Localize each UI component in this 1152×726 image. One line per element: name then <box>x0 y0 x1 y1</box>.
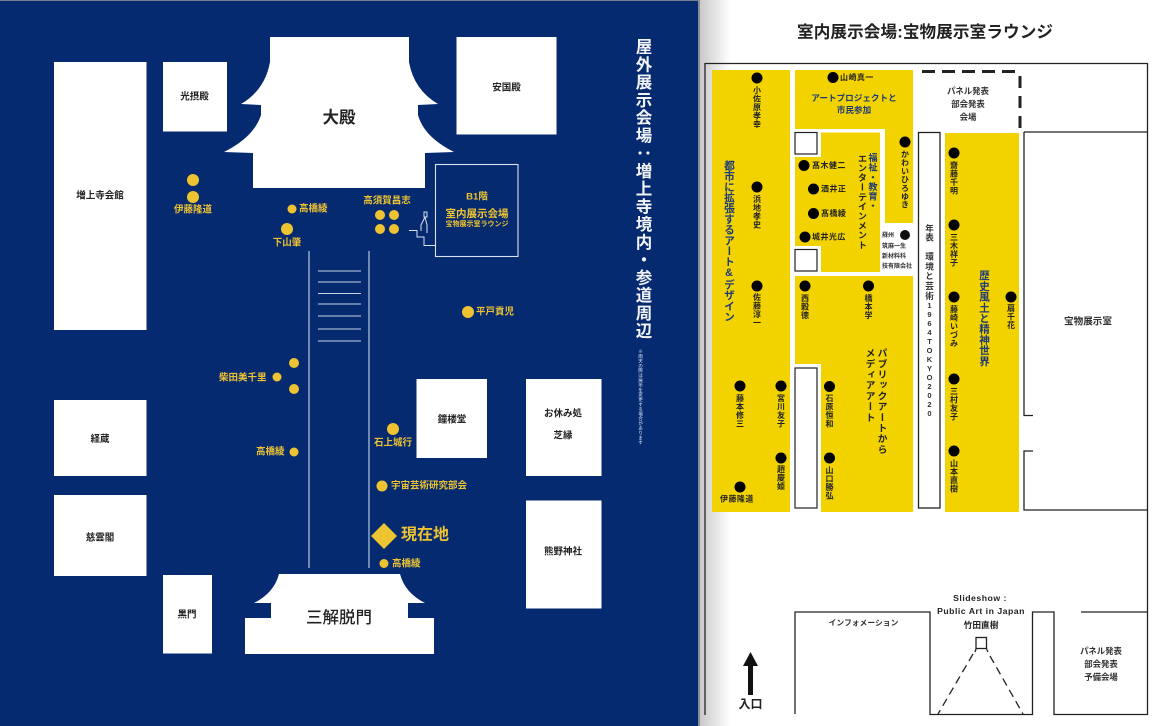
room: 予備会場 <box>1080 646 1123 682</box>
zone: パブリックアートからメディアアート: 西穀徳 <box>800 294 810 320</box>
marker: 平戸貢児: 平戸貢児 <box>476 306 515 318</box>
zone: 都市に拡張するアート&デザイン: 宮川友子 <box>776 393 786 428</box>
building: 経蔵: 経蔵 <box>90 433 110 445</box>
slideshow: 竹田直樹: 竹田直樹 <box>964 619 999 630</box>
marker: 高須賀昌志 <box>363 194 411 234</box>
floor plan walls <box>705 64 1148 715</box>
icon: stairs with figure <box>409 212 435 246</box>
timeline box <box>918 132 940 508</box>
marker: 高橋綾 north <box>288 202 328 214</box>
building: 安国殿 <box>456 37 556 134</box>
note: small vertical text: ※雨天の際は展示を変更する場合があります <box>638 349 644 446</box>
exhibitor: 蘇州筑麻一生新材料科技有限会社: 新材料科 <box>882 252 906 260</box>
zone: パブリックアートからメディアアート <box>795 276 913 512</box>
zone: アートプロジェクトと市民参加: かわいひろゆき <box>900 150 910 209</box>
zone: 都市に拡張するアート&デザイン: 藤本修三 <box>736 393 744 428</box>
dashed panel venue: パネル発表 <box>947 86 990 96</box>
marker: 柴田美千里 <box>219 358 299 394</box>
zone: 歴史風土と精神世界 <box>945 133 1019 512</box>
zone: 都市に拡張するアート&デザイン: 伊藤隆道 <box>720 494 754 504</box>
building: 慈雲閣 <box>54 495 146 576</box>
zone: アートプロジェクトと市民参加 <box>795 70 913 223</box>
exhibitor: 蘇州筑麻一生新材料科技有限会社: 技有限会社 <box>882 262 912 270</box>
arrow: entrance: 入口 <box>738 697 763 711</box>
building: お休み処 芝縁 <box>526 379 602 476</box>
marker: 高須賀昌志: 高須賀昌志 <box>363 194 411 206</box>
heading: indoor venue: 室内展示会場:宝物展示室ラウンジ <box>797 22 1053 42</box>
slideshow: 竹田直樹: Public Art in Japan <box>937 606 1025 616</box>
zone: パブリックアートからメディアアート: 石原恒和 <box>825 394 834 428</box>
exhibitor: 蘇州筑麻一生新材料科技有限会社: 蘇州 <box>882 231 894 239</box>
zone: 福祉・教育・エンターテインメント: 髙木健二 <box>812 160 846 170</box>
zone: パブリックアートからメディアアート: 山口勝弘 <box>825 466 834 500</box>
zone: 歴史風土と精神世界: 扇千花 <box>1006 304 1016 330</box>
exhibitor: 蘇州筑麻一生新材料科技有限会社: 筑麻一生 <box>882 242 906 250</box>
zone: 歴史風土と精神世界: 歴史風土と精神世界 <box>978 270 990 367</box>
building: 熊野神社 <box>526 500 602 608</box>
building: 黒門 <box>163 575 212 654</box>
marker: 伊藤隆道: 伊藤隆道 <box>174 204 212 216</box>
zone: アートプロジェクトと市民参加: アートプロジェクトと <box>811 93 897 103</box>
slideshow: 竹田直樹: Slideshow : <box>953 593 1007 603</box>
zone: 福祉・教育・エンターテインメント: エンターテインメント <box>857 154 867 250</box>
zone: 福祉・教育・エンターテインメント: 酒井正 <box>821 184 846 194</box>
zone: パブリックアートからメディアアート: パブリックアートから <box>876 348 887 455</box>
panel: indoor venue map <box>698 0 1152 726</box>
zone: 歴史風土と精神世界: 山本直樹 <box>950 459 958 493</box>
zone: 都市に拡張するアート&デザイン: 都市に拡張するアート&デザイン <box>723 159 735 322</box>
zone: 都市に拡張するアート&デザイン: 浜地孝史 <box>752 194 762 229</box>
room: 予備会場: パネル発表 <box>1080 646 1123 656</box>
building: 大殿: 大殿 <box>322 108 356 127</box>
white boxes <box>795 132 817 508</box>
marker: 高橋綾 west <box>256 446 298 458</box>
timeline box: 年表 <box>924 223 934 243</box>
building: 鐘楼堂 <box>416 379 487 458</box>
zone: アートプロジェクトと市民参加: 山崎真一 <box>840 72 874 82</box>
arrow: entrance <box>738 652 763 711</box>
building: 経蔵 <box>54 400 146 476</box>
marker: 伊藤隆道 <box>174 174 212 216</box>
building: 大殿 <box>224 37 454 188</box>
box: B1 indoor venue <box>436 164 518 256</box>
room: 予備会場: 部会発表 <box>1084 659 1118 669</box>
zone: 福祉・教育・エンターテインメント: 髙橋綾 <box>821 208 846 218</box>
box: B1 indoor venue: 室内展示会場 <box>446 207 509 220</box>
approach path lines <box>309 251 369 568</box>
building: 増上寺会館 <box>54 62 146 330</box>
marker: 現在地 <box>371 523 449 549</box>
slideshow: 竹田直樹 <box>937 593 1025 714</box>
building: 慈雲閣: 慈雲閣 <box>86 532 114 544</box>
building: 鐘楼堂: 鐘楼堂 <box>438 414 466 426</box>
building: 増上寺会館: 増上寺会館 <box>76 190 124 202</box>
zone: 福祉・教育・エンターテインメント <box>795 132 880 272</box>
marker: 柴田美千里: 柴田美千里 <box>219 372 267 384</box>
marker: 下山肇: 下山肇 <box>273 236 302 248</box>
marker: 平戸貢児 <box>462 306 515 318</box>
zone: 福祉・教育・エンターテインメント: 城井光広 <box>812 232 846 242</box>
zone: 都市に拡張するアート&デザイン: 趙慶姫 <box>776 464 786 491</box>
marker: 高橋綾 west: 高橋綾 <box>256 446 285 458</box>
room: インフォメーション: インフォメーション <box>829 618 899 628</box>
marker: 石上城行: 石上城行 <box>374 436 412 448</box>
marker: 高橋綾 south: 高橋綾 <box>392 558 421 570</box>
zone: 都市に拡張するアート&デザイン: 佐藤淳一 <box>752 292 762 327</box>
zone: パブリックアートからメディアアート: 橋本学 <box>864 293 873 319</box>
marker: 宇宙芸術研究部会: 宇宙芸術研究部会 <box>391 480 468 492</box>
zone: 歴史風土と精神世界: 三木祥子 <box>950 233 958 267</box>
zone: 都市に拡張するアート&デザイン <box>712 70 790 512</box>
heading: outdoor venue: 屋外展示会場：増上寺境内・参道周辺 <box>633 38 652 340</box>
building: 安国殿: 安国殿 <box>492 82 521 94</box>
building: 光摂殿: 光摂殿 <box>180 90 209 102</box>
zone: パブリックアートからメディアアート: メディアアート <box>864 348 875 423</box>
marker: 石上城行 <box>374 423 412 448</box>
dashed panel venue <box>922 72 1020 129</box>
building: 三解脱門 <box>245 574 434 654</box>
exhibitor: 蘇州筑麻一生新材料科技有限会社 <box>882 230 912 270</box>
marker: 現在地: 現在地 <box>401 524 449 544</box>
dashed panel venue: 部会発表 <box>951 99 985 109</box>
dashed panel venue: 会場 <box>960 112 977 122</box>
marker: 高橋綾 north: 高橋綾 <box>299 202 328 214</box>
zone: 都市に拡張するアート&デザイン: 小佐原孝幸 <box>752 85 762 129</box>
building: お休み処 芝縁: お休み処 <box>544 408 582 420</box>
building: 三解脱門: 三解脱門 <box>306 608 372 627</box>
zone: 歴史風土と精神世界: 齋藤千明 <box>950 160 958 195</box>
panel: outdoor venue map <box>0 0 698 726</box>
building: お休み処 芝縁: 芝縁 <box>553 430 573 442</box>
zone: 歴史風土と精神世界: 三村友子 <box>950 387 958 421</box>
box: B1 indoor venue: 宝物展示室ラウンジ <box>446 219 508 228</box>
marker: 高橋綾 south <box>380 558 421 570</box>
building: 光摂殿 <box>163 62 227 132</box>
timeline box: 1964TOKYO2020 <box>925 301 934 418</box>
room: 宝物展示室: 宝物展示室 <box>1064 316 1112 328</box>
zone: アートプロジェクトと市民参加: 市民参加 <box>837 104 871 115</box>
timeline box: 環境と芸術 <box>924 252 934 301</box>
box: B1 indoor venue: B1階 <box>466 190 488 202</box>
zone: 福祉・教育・エンターテインメント: 福祉・教育・ <box>867 152 878 211</box>
building: 黒門: 黒門 <box>177 610 197 620</box>
building: 熊野神社: 熊野神社 <box>544 546 582 558</box>
zone: 歴史風土と精神世界: 藤崎いづみ <box>950 304 958 347</box>
marker: 下山肇 <box>273 223 302 248</box>
room: 予備会場: 予備会場 <box>1084 672 1118 682</box>
